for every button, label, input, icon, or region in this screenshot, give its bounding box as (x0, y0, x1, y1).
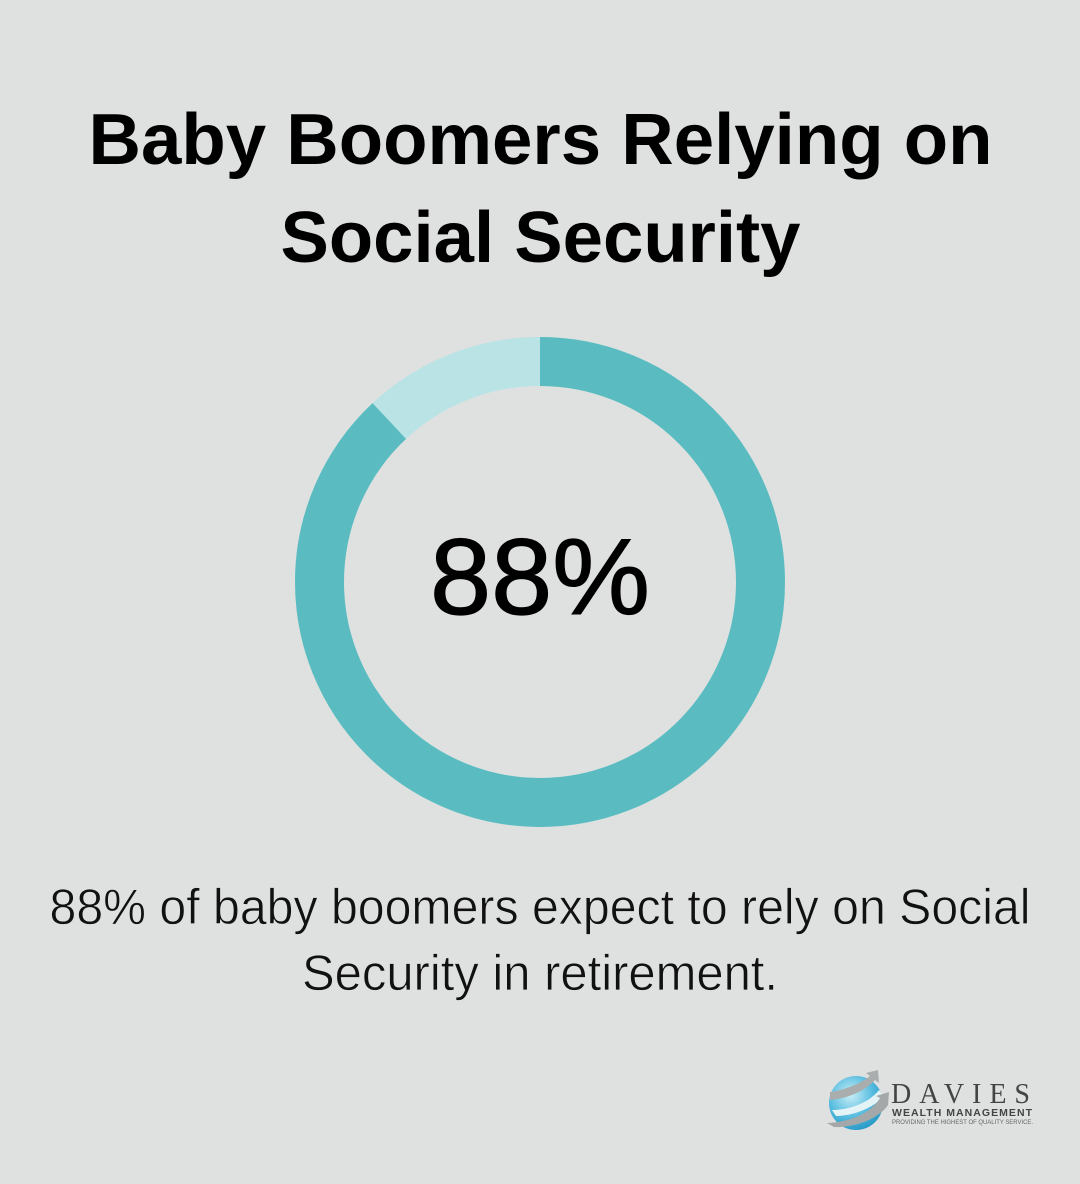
title (88, 100, 992, 278)
icon: globe with arrows (827, 1070, 889, 1130)
title: Baby Boomers Relying on (88, 100, 992, 180)
logo wordmark: DAVIES (891, 1079, 1030, 1110)
donut chart: 88% (320, 362, 760, 802)
logo tagline: PROVIDING THE HIGHEST OF QUALITY SERVICE. (892, 1119, 1033, 1126)
description text: Security in retirement. (302, 945, 778, 1001)
title: Social Security (280, 198, 800, 278)
description text (50, 879, 1030, 1001)
logo: Davies Wealth Management (827, 1070, 1033, 1130)
donut value: 88% (430, 516, 650, 637)
description text: 88% of baby boomers expect to rely on Social (50, 879, 1030, 935)
logo subtitle: WEALTH MANAGEMENT (892, 1107, 1033, 1119)
